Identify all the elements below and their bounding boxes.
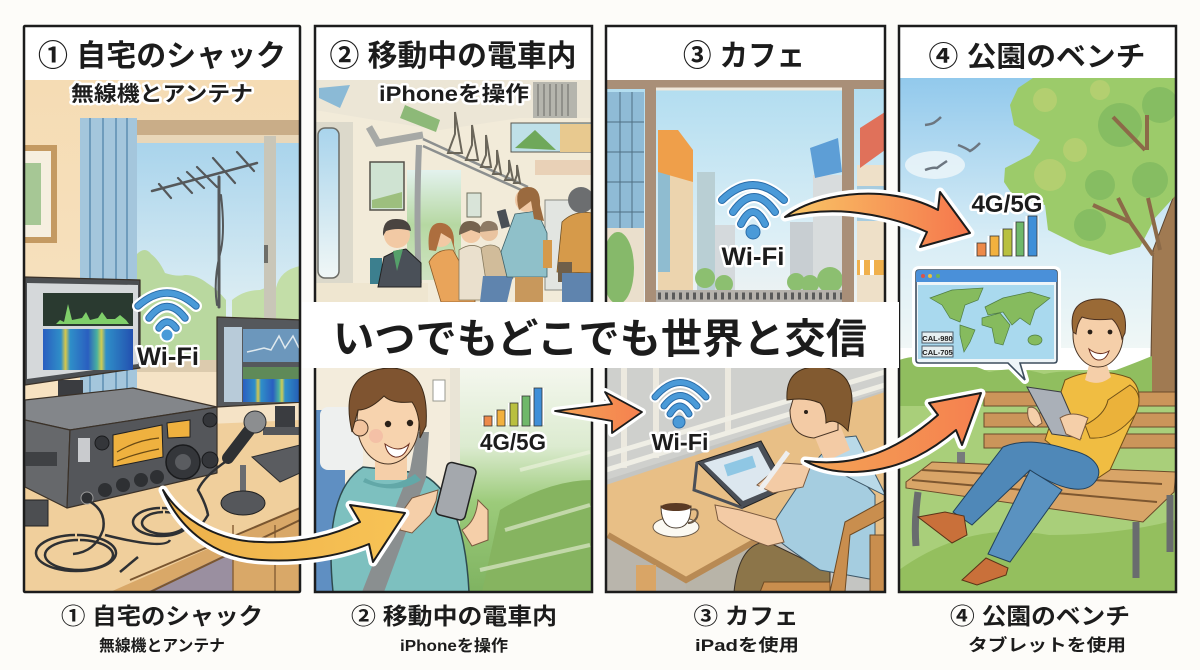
picture frame bbox=[25, 145, 57, 243]
tablet bbox=[694, 441, 787, 508]
4G/5G signal: park bbox=[972, 191, 1042, 256]
title band: いつでもどこでも世界と交信 bbox=[333, 316, 867, 362]
coffee cup bbox=[653, 503, 699, 537]
caption 3 bbox=[694, 603, 799, 655]
arrow: shack to train bbox=[163, 490, 405, 562]
panel frame 4 bbox=[899, 26, 1176, 592]
panel frame 3 bbox=[606, 26, 885, 592]
wi-fi icon: shack: Wi-Fi bbox=[137, 343, 199, 371]
train upper scene bbox=[315, 80, 594, 303]
left monitor with spectrum bbox=[25, 277, 140, 408]
seated man bbox=[918, 299, 1139, 585]
wi-fi icon: cafe bottom: Wi-Fi bbox=[652, 429, 708, 455]
caption 2 bbox=[351, 603, 557, 655]
4G/5G signal: train bbox=[480, 388, 546, 455]
window with sky and trees bbox=[137, 120, 299, 372]
panel frame 2 bbox=[315, 26, 592, 592]
title band bbox=[302, 302, 899, 368]
world map popup: CAL-705 bbox=[922, 348, 953, 357]
antenna bbox=[152, 152, 257, 307]
panel: home shack bbox=[25, 80, 299, 591]
wi-fi icon: cafe top bbox=[722, 185, 784, 271]
panel headings bbox=[38, 40, 1146, 106]
cafe lower scene bbox=[606, 367, 886, 595]
tablet in lap bbox=[1027, 387, 1088, 440]
desk bbox=[24, 420, 300, 592]
panel: cafe bbox=[607, 80, 884, 591]
subheading 1: 無線機とアンテナ bbox=[71, 83, 253, 106]
wi-fi icon: shack bbox=[137, 293, 199, 371]
caption 1: ① 自宅のシャック bbox=[61, 603, 263, 629]
caption 2: ② 移動中の電車内 bbox=[351, 603, 557, 629]
train lower scene bbox=[315, 368, 592, 592]
microphone bbox=[221, 411, 266, 515]
world map popup: CAL-980 bbox=[922, 334, 953, 343]
transceiver radio bbox=[25, 388, 218, 508]
tree bbox=[1004, 78, 1175, 357]
man at cafe bbox=[734, 367, 886, 592]
heading 3: ③ カフェ bbox=[683, 40, 805, 73]
caption 1: 無線機とアンテナ bbox=[99, 636, 225, 655]
caption 4: タブレットを使用 bbox=[968, 635, 1126, 655]
phone and hand bbox=[400, 461, 488, 546]
4G/5G signal: train: 4G/5G bbox=[480, 429, 546, 455]
hands and stylus bbox=[715, 452, 811, 546]
seated passengers and standing riders bbox=[378, 187, 594, 303]
cables bbox=[36, 460, 228, 572]
caption 2: iPhoneを操作 bbox=[400, 637, 508, 655]
wi-fi icon: cafe top: Wi-Fi bbox=[722, 243, 784, 271]
panel frame 1 bbox=[24, 26, 300, 592]
caption 4 bbox=[950, 603, 1130, 655]
panel: train bbox=[316, 80, 591, 591]
subheading 2: iPhoneを操作 bbox=[379, 83, 529, 106]
caption 3: iPadを使用 bbox=[695, 636, 799, 655]
birds bbox=[925, 117, 980, 170]
heading 4: ④ 公園のベンチ bbox=[928, 41, 1146, 72]
world map popup bbox=[916, 270, 1057, 380]
caption 4: ④ 公園のベンチ bbox=[950, 603, 1130, 629]
arrow: train to cafe bbox=[555, 392, 642, 433]
4G/5G signal: park: 4G/5G bbox=[972, 191, 1042, 218]
caption 1 bbox=[61, 603, 263, 655]
curtain bbox=[80, 118, 137, 393]
arrow: cafe to park bottom bbox=[805, 393, 981, 472]
chair bbox=[760, 500, 885, 592]
heading 1: ① 自宅のシャック bbox=[38, 40, 286, 73]
bench bbox=[906, 392, 1176, 578]
panel: park bench bbox=[900, 78, 1175, 591]
heading 2: ② 移動中の電車内 bbox=[330, 40, 576, 73]
keyboard bbox=[252, 445, 300, 482]
right monitor bbox=[217, 317, 304, 435]
caption 3: ③ カフェ bbox=[694, 603, 798, 629]
wi-fi icon: cafe bottom bbox=[652, 382, 708, 455]
arrow: cafe to park top bbox=[785, 192, 970, 247]
cafe upper scene bbox=[602, 80, 885, 304]
